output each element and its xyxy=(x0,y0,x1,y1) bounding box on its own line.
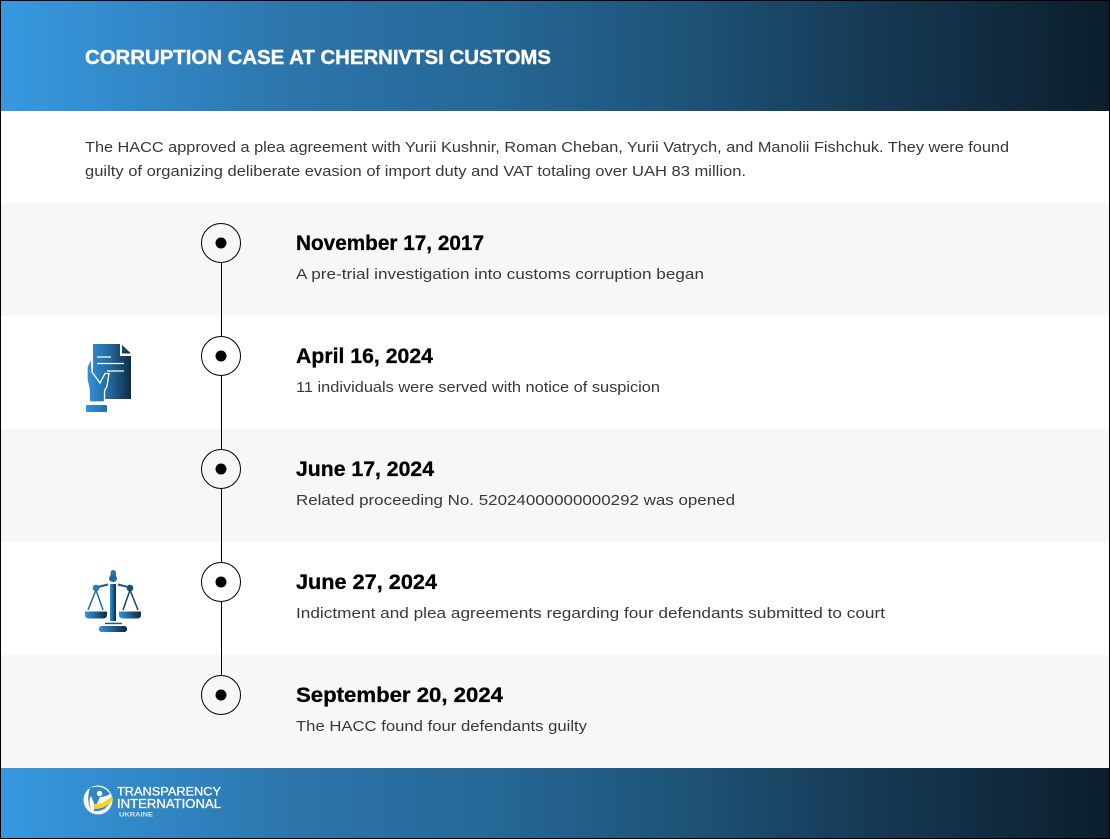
entry: June 17, 2024: Related proceeding No. 52024000000000292 was opened xyxy=(296,492,735,509)
entry: June 17, 2024 xyxy=(296,458,735,509)
entry: April 16, 2024: 11 individuals were served with notice of suspicion xyxy=(296,379,660,396)
intro text: guilty of organizing deliberate evasion of import duty and VAT totaling over UAH 83 million. xyxy=(85,163,746,180)
entry: June 17, 2024: June 17, 2024 xyxy=(296,458,434,481)
band: row 1 background xyxy=(1,203,1109,316)
logo: Transparency International Ukraine: INTERNATIONAL xyxy=(117,797,221,811)
entry: September 20, 2024: September 20, 2024 xyxy=(296,684,503,707)
marker: November 17, 2017 xyxy=(202,224,240,262)
logo: Transparency International Ukraine: UKRAINE xyxy=(119,812,154,818)
icon: scales of justice xyxy=(85,570,141,632)
entry: November 17, 2017: A pre-trial investigation into customs corruption began xyxy=(296,266,704,283)
marker: April 16, 2024 xyxy=(202,336,240,376)
entry: April 16, 2024 xyxy=(296,345,660,396)
logo: Transparency International Ukraine xyxy=(84,784,221,818)
band: row 3 background xyxy=(1,429,1109,542)
footer banner xyxy=(1,768,1109,838)
entry: June 27, 2024: June 27, 2024 xyxy=(296,571,437,594)
entry: June 27, 2024 xyxy=(296,571,886,622)
icon: hand holding document xyxy=(86,344,131,412)
band: row 5 background xyxy=(1,655,1109,768)
timeline axis xyxy=(202,224,240,714)
entry: April 16, 2024: April 16, 2024 xyxy=(296,345,433,368)
logo emblem xyxy=(84,786,113,814)
marker: June 17, 2024 xyxy=(202,450,240,488)
entry: November 17, 2017: November 17, 2017 xyxy=(296,232,484,255)
entry: September 20, 2024 xyxy=(296,684,588,735)
title: CORRUPTION CASE AT CHERNIVTSI CUSTOMS xyxy=(85,46,551,69)
intro text xyxy=(85,139,1009,180)
logo: Transparency International Ukraine: TRANSPARENCY xyxy=(117,784,221,798)
entry: September 20, 2024: The HACC found four defendants guilty xyxy=(296,718,588,735)
entry: November 17, 2017 xyxy=(296,232,704,283)
header banner xyxy=(1,1,1109,111)
entry: June 27, 2024: Indictment and plea agreements regarding four defendants submitted to court xyxy=(296,605,886,622)
marker: June 27, 2024 xyxy=(202,562,240,602)
marker: September 20, 2024 xyxy=(202,676,240,714)
intro text: The HACC approved a plea agreement with Yurii Kushnir, Roman Cheban, Yurii Vatrych, and Manolii Fishchuk. They were found xyxy=(85,139,1009,156)
